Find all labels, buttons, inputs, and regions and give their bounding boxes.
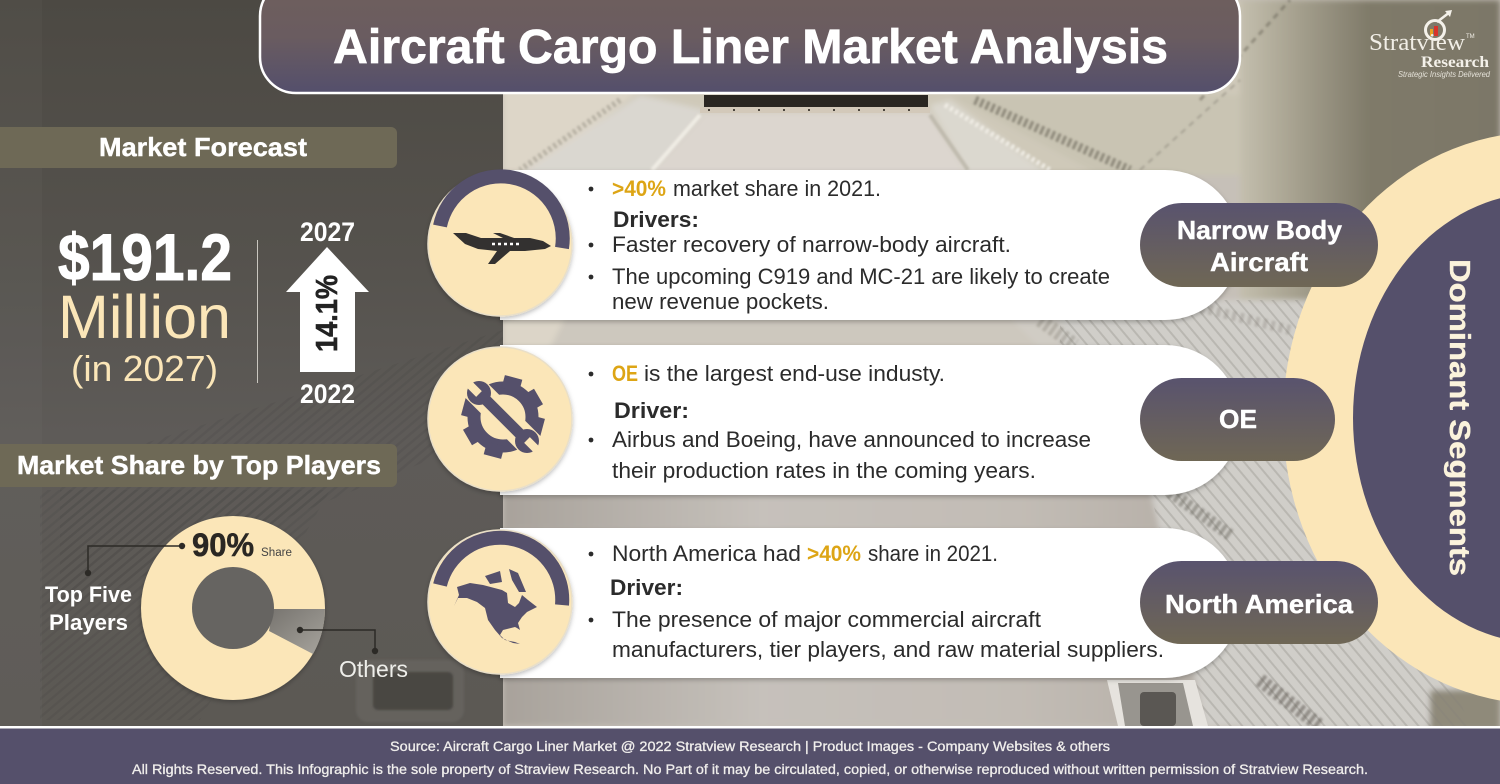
callout: top five players: Top Five (45, 582, 132, 607)
pill: OE (1140, 378, 1335, 461)
device in floor (1107, 680, 1208, 726)
dominant segments ring (1283, 132, 1500, 704)
callout: top five players: Players (49, 610, 128, 635)
pill: Narrow Body Aircraft: Aircraft (1210, 247, 1308, 277)
icon: North America map gauge (428, 530, 572, 674)
market value: Million (58, 283, 231, 351)
text: OE driver: their production rates in the coming years. (612, 458, 1036, 483)
pill: OE: OE (1219, 404, 1257, 434)
text: North America driver (589, 541, 1164, 662)
growth arrow with CAGR (286, 217, 369, 409)
pill: North America (1140, 561, 1378, 644)
text: narrow body drivers: >40% (612, 176, 666, 201)
text: narrow body drivers: Faster recovery of narrow-body aircraft. (612, 232, 1011, 257)
market value: (in 2027) (71, 348, 218, 389)
title banner (260, 0, 1240, 93)
left dark panel (0, 0, 503, 726)
heading bar: market share: Market Share by Top Players (17, 450, 381, 480)
icon: gear and wrench (428, 347, 572, 491)
text: narrow body drivers: Drivers: (613, 207, 699, 232)
text: OE driver: Driver: (614, 398, 689, 423)
logo: Stratview Research: Research (1421, 54, 1489, 71)
rights line: All Rights Reserved. This Infographic is the sole property of Straview Research. No Part of it may be circulated, copied, or otherwise reproduced without written permission of Stratview Research. (132, 762, 1368, 777)
logo: Stratview Research (1369, 10, 1491, 79)
donut chart (141, 516, 325, 700)
market value (58, 220, 232, 389)
growth arrow with CAGR: 2022 (300, 379, 355, 409)
logo: Stratview Research: TM (1466, 34, 1475, 40)
text: North America driver: The presence of major commercial aircraft (612, 607, 1041, 632)
growth arrow with CAGR: 14.1% (309, 275, 344, 352)
text: North America driver: manufacturers, tier players, and raw material suppliers. (612, 637, 1164, 662)
callout: others: Others (339, 656, 408, 682)
card: OE (428, 345, 1240, 495)
pill: North America: North America (1165, 589, 1354, 619)
text: North America driver: North America had (612, 541, 801, 566)
heading bar: market forecast: Market Forecast (99, 132, 307, 162)
heading bar: market share (0, 444, 397, 487)
callout: top five players: 90% (192, 527, 254, 563)
market value: $191.2 (58, 220, 232, 294)
source line: Source: Aircraft Cargo Liner Market @ 2022 Stratview Research | Product Images - Company Websites & others (390, 739, 1110, 754)
panel: market forecast (0, 127, 397, 409)
callout: others (297, 627, 408, 682)
footer band (0, 726, 1500, 784)
title text: Aircraft Cargo Liner Market Analysis (333, 21, 1168, 74)
panel: market share by top players (0, 444, 408, 700)
text: OE driver: is the largest end-use industy. (644, 361, 945, 386)
text: North America driver: Driver: (610, 575, 683, 600)
card: North America (428, 528, 1240, 678)
text: narrow body drivers: The upcoming C919 and MC-21 are likely to create (612, 264, 1110, 289)
heading bar: market forecast (0, 127, 397, 168)
logo: Stratview Research: Stratview (1369, 30, 1466, 56)
logo: Stratview Research: Strategic Insights Delivered (1398, 70, 1491, 79)
icon: airplane gauge (428, 172, 572, 316)
pill: Narrow Body Aircraft (1140, 203, 1378, 287)
text: OE driver: Airbus and Boeing, have announced to increase (612, 427, 1091, 452)
callout: top five players (45, 527, 292, 635)
text: narrow body drivers: market share in 2021. (673, 176, 881, 201)
callout: top five players: Share (261, 547, 292, 559)
text: North America driver: share in 2021. (868, 541, 998, 566)
growth arrow with CAGR: 2027 (300, 217, 355, 247)
pill: Narrow Body Aircraft: Narrow Body (1177, 215, 1343, 245)
text: North America driver: >40% (807, 541, 861, 566)
logo icon (1426, 10, 1452, 40)
text: OE driver (589, 361, 1091, 483)
label: dominant segments: Dominant Segments (1443, 259, 1475, 576)
text: narrow body drivers (589, 176, 1110, 314)
text: narrow body drivers: new revenue pockets. (612, 289, 829, 314)
cargo slot (700, 95, 930, 113)
text: OE driver: OE (612, 361, 638, 386)
card: narrow body aircraft (428, 170, 1240, 320)
